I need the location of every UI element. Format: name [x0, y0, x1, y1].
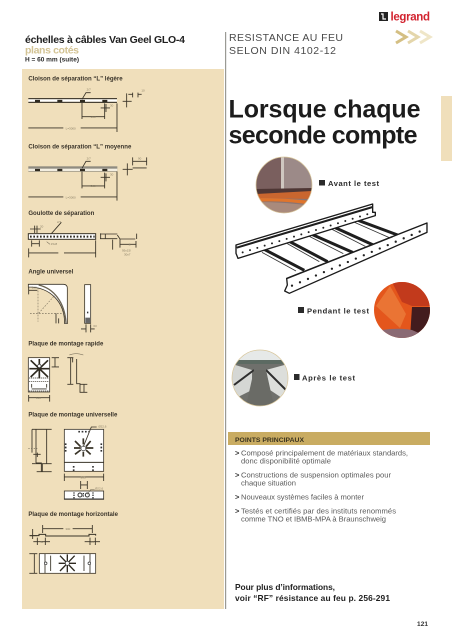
photo: avant le test	[256, 157, 312, 213]
drawing: goulotte de séparation: 30x7	[124, 253, 131, 257]
drawing: cloison L moyenne: 90	[138, 156, 142, 160]
side tab	[441, 96, 452, 161]
label: pendant le test: Pendant le test	[307, 306, 369, 316]
drawing: plaque de montage universelle: Ø22,6	[95, 486, 103, 490]
heading: section title: RESISTANCE AU FEU	[229, 32, 343, 44]
photo: pendant le test	[374, 282, 430, 338]
bullet list: Nouveaux systèmes faciles à monter	[241, 492, 364, 502]
drawing: goulotte de séparation: 20	[40, 225, 44, 229]
heading: product title: H = 60 mm (suite)	[25, 56, 79, 64]
drawing: goulotte de séparation	[28, 210, 137, 257]
bullet list: Testés et certifiés par des instituts renommés	[241, 506, 396, 516]
bullet list: >	[235, 506, 240, 516]
headline	[228, 96, 421, 150]
icon: chevrons	[396, 31, 430, 43]
bullet list: comme TNO et IBMB-MPA à Braunschweig	[241, 514, 386, 524]
heading: section title	[229, 32, 343, 57]
callout: further information: voir “RF” résistance au feu p. 256-291	[235, 593, 390, 603]
illustration: cable ladder	[236, 204, 427, 293]
drawing: cloison L moyenne	[28, 144, 147, 201]
panel: dimensioned drawings background	[22, 69, 224, 609]
heading: product title: échelles à câbles Van Geel GLO-4	[25, 34, 185, 46]
drawing: plaque de montage horizontale	[28, 511, 118, 573]
drawing: plaque de montage rapide: Plaque de montage rapide	[28, 341, 104, 348]
drawing: cloison L légère: 10	[141, 88, 145, 92]
drawing: cloison L légère: L=3000	[66, 126, 76, 130]
callout: further information: Pour plus d’informations,	[235, 582, 335, 592]
drawing: cloison L légère	[28, 75, 145, 132]
drawing: plaque de montage universelle: 205	[81, 475, 86, 479]
drawing: cloison L moyenne: Cloison de séparation “L” moyenne	[28, 144, 132, 151]
drawing: angle universel: Angle universel	[28, 269, 74, 276]
bullet list	[235, 448, 408, 524]
bullet list: >	[235, 448, 240, 458]
drawing: cloison L légère: 30	[110, 104, 114, 108]
heading: product title	[25, 34, 185, 64]
heading: product title: plans cotés	[25, 44, 79, 56]
drawing: goulotte de séparation: B	[129, 243, 131, 247]
header bar	[228, 432, 430, 445]
label: avant le test: Avant le test	[328, 179, 379, 188]
panel: points principaux	[228, 432, 430, 524]
bullet list: >	[235, 492, 240, 502]
headline: seconde compte	[228, 122, 418, 150]
drawing: goulotte de séparation: 15x8	[51, 242, 57, 246]
logo: legrand: legrand	[390, 12, 430, 24]
bullet list: chaque situation	[241, 478, 296, 488]
page number: 121	[417, 621, 428, 628]
drawing: goulotte de séparation: 95x15/	[122, 249, 131, 253]
bullet list: donc disponibilité optimale	[241, 456, 331, 466]
callout: further information	[235, 582, 390, 603]
drawing: plaque de montage horizontale: 300	[65, 527, 71, 531]
bullet list: Constructions de suspension optimales pour	[241, 470, 391, 480]
bullet list: Composé principalement de matériaux standards,	[241, 448, 408, 458]
drawing: goulotte de séparation: Goulotte de séparation	[28, 210, 94, 217]
drawing: plaque de montage horizontale: 40	[40, 540, 44, 544]
drawing: cloison L moyenne: 300	[91, 184, 96, 188]
header bar: POINTS PRINCIPAUX	[235, 437, 304, 444]
drawing: plaque de montage universelle: Ø22,6	[98, 424, 107, 428]
heading: section title: SELON DIN 4102-12	[229, 45, 336, 57]
drawing: goulotte de séparation: 2/7	[57, 220, 61, 224]
drawing: angle universel: 100	[32, 286, 37, 290]
drawing: cloison L légère: Cloison de séparation “L” légère	[28, 75, 123, 82]
headline: Lorsque chaque	[228, 96, 421, 124]
column divider	[225, 32, 226, 609]
drawing: cloison L moyenne: L=3000	[66, 195, 76, 199]
drawing: angle universel: 63	[93, 324, 97, 328]
drawing: plaque de montage rapide: 120	[36, 396, 41, 400]
drawing: plaque de montage horizontale: Plaque de montage horizontale	[28, 511, 118, 518]
label: après le test: Après le test	[302, 374, 355, 382]
bullet list: >	[235, 470, 240, 480]
drawing: cloison L moyenne: 2/7	[87, 156, 91, 160]
drawing: plaque de montage rapide	[28, 341, 104, 402]
drawing: cloison L légère: 2/7	[87, 88, 91, 92]
drawing: plaque de montage universelle	[28, 412, 118, 499]
drawing: plaque de montage universelle: Plaque de montage universelle	[28, 412, 118, 419]
drawing: plaque de montage horizontale: 40	[91, 540, 94, 544]
drawing: cloison L légère: 300	[91, 115, 96, 119]
photo: après le test	[232, 350, 288, 406]
drawing: cloison L moyenne: 30	[110, 173, 114, 177]
drawing: angle universel	[28, 269, 97, 332]
